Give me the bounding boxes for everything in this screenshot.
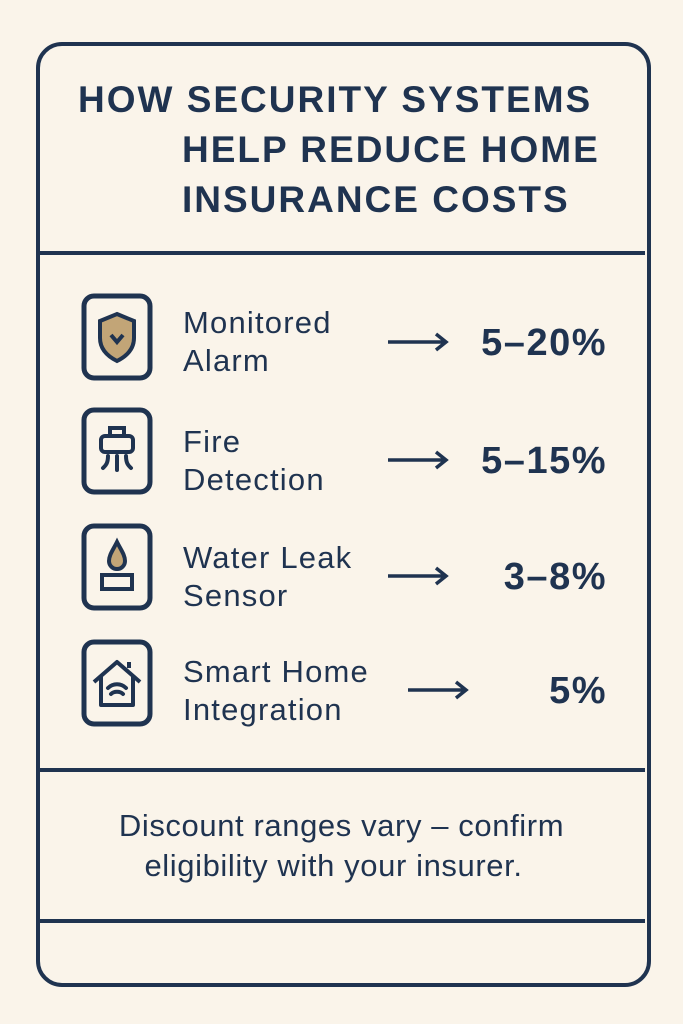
footer note: Discount ranges vary – confirm — [119, 808, 564, 843]
title — [78, 79, 600, 220]
icon: smart house — [82, 640, 152, 726]
arrow — [408, 680, 469, 700]
footer note — [119, 808, 564, 883]
row: monitored alarm — [82, 294, 607, 380]
row: monitored alarm: 5–20% — [481, 322, 607, 364]
title: HOW SECURITY SYSTEMS — [78, 79, 592, 120]
footer note: eligibility with your insurer. — [144, 848, 523, 883]
icon: shield — [82, 294, 152, 380]
row: smart home: 5% — [549, 670, 607, 712]
row: water leak sensor: Water Leak — [183, 540, 352, 575]
arrow — [388, 566, 449, 586]
row: fire detection — [82, 408, 607, 497]
title: HELP REDUCE HOME — [182, 129, 600, 170]
icon: smoke detector — [82, 408, 152, 494]
row: water leak sensor: 3–8% — [504, 556, 607, 598]
row: fire detection: 5–15% — [481, 440, 607, 482]
row: fire detection: Detection — [183, 462, 325, 497]
row: monitored alarm: Monitored — [183, 305, 332, 340]
row: water leak sensor: Sensor — [183, 578, 288, 613]
title: INSURANCE COSTS — [182, 179, 570, 220]
arrow — [388, 450, 449, 470]
row: smart home — [82, 640, 607, 727]
row: fire detection: Fire — [183, 424, 241, 459]
row: water leak sensor — [82, 524, 607, 613]
row: smart home: Integration — [183, 692, 343, 727]
row: smart home: Smart Home — [183, 654, 369, 689]
row: monitored alarm: Alarm — [183, 343, 270, 378]
arrow — [388, 332, 449, 352]
icon: water drop — [82, 524, 152, 610]
